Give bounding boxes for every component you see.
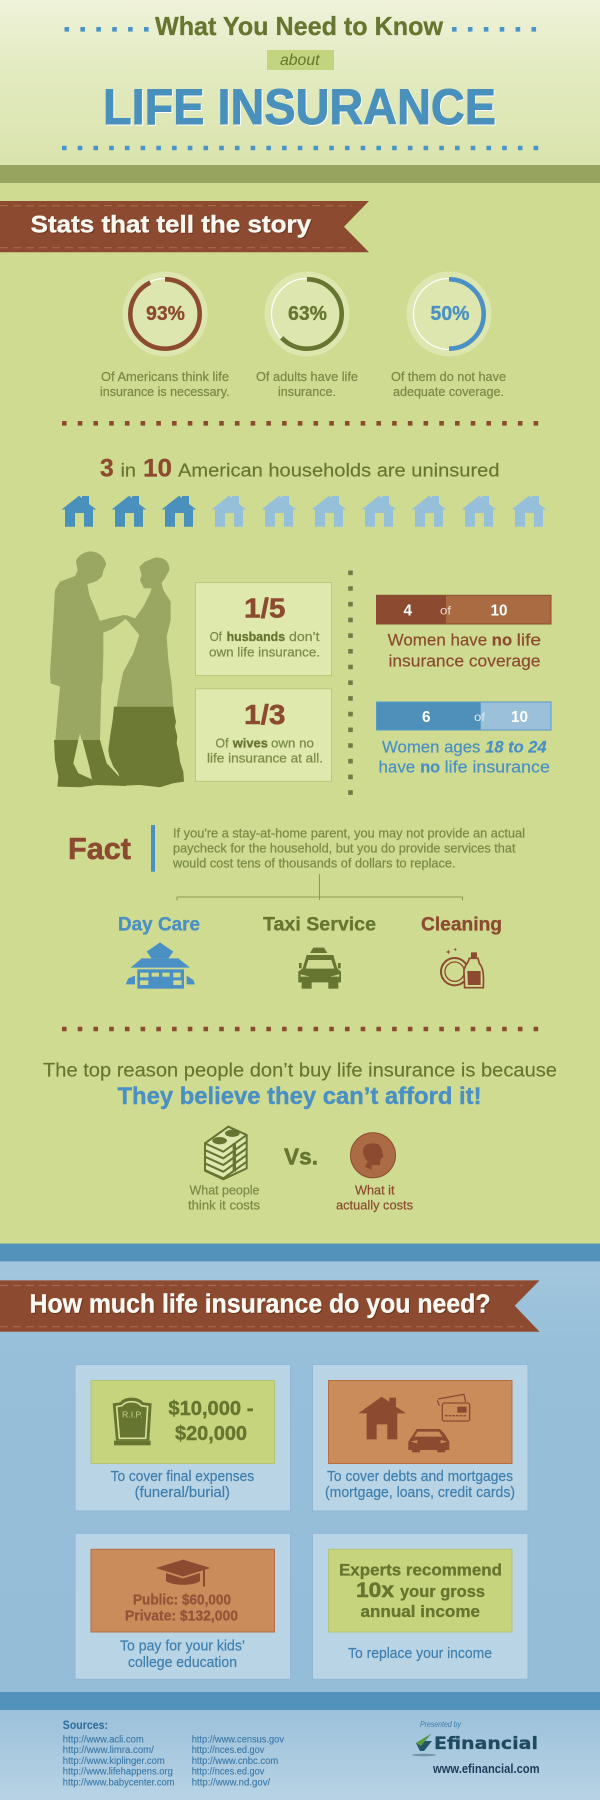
- stat: 63 percent: insurance.: [278, 384, 336, 399]
- comparison: what people think it costs: [188, 1127, 260, 1212]
- stat: 93 percent: [100, 272, 230, 399]
- stat bar: 6 of 10 women 18 to 24: [376, 702, 551, 777]
- label: versus: Vs.: [284, 1143, 318, 1169]
- fact callout: paycheck for the household, but you do provide services that: [173, 840, 516, 855]
- card: final expenses: $10,000 -: [168, 1398, 253, 1420]
- icon: tombstone: R.I.P.: [122, 1411, 143, 1420]
- illustration: couple silhouette: [50, 551, 184, 787]
- footer: [0, 1692, 600, 1800]
- service: day care: [118, 915, 200, 989]
- about tag: about: [280, 52, 320, 69]
- service: cleaning: [421, 915, 502, 988]
- service: day care: Day Care: [118, 915, 200, 936]
- stat bar: 6 of 10 women 18 to 24: Women ages: [382, 738, 480, 756]
- stat bar: 6 of 10 women 18 to 24: life insurance: [445, 759, 550, 777]
- icon: plate and detergent bottle: [441, 948, 484, 988]
- card: one fifth of husbands: [196, 582, 332, 676]
- comparison: what people think it costs: think it costs: [188, 1197, 260, 1212]
- sources list: http://www.census.gov: [192, 1734, 284, 1746]
- sources list: http://www.lifehappens.org: [63, 1767, 173, 1778]
- sources list: [63, 1718, 284, 1788]
- heading: 3 in 10 households: 10: [143, 455, 172, 483]
- card: final expenses: [75, 1364, 290, 1511]
- sources list: http://nces.ed.gov: [192, 1745, 264, 1756]
- service: cleaning: Cleaning: [421, 915, 502, 936]
- card: one third of wives: Of: [216, 735, 229, 750]
- main title: LIFE INSURANCE: [103, 79, 496, 135]
- card: one fifth of husbands: don’t: [289, 629, 320, 644]
- fact callout: Fact: [68, 831, 131, 866]
- card: replace your income: To replace your income: [348, 1646, 492, 1662]
- logo: Efinancial: [412, 1719, 540, 1776]
- card: one fifth of husbands: husbands: [227, 629, 285, 644]
- card: final expenses: $20,000: [175, 1423, 247, 1445]
- banner: how much life insurance: [0, 1280, 540, 1332]
- icon: coin with head: [350, 1133, 396, 1178]
- stat bar: 4 of 10 women: 4: [404, 603, 412, 620]
- icon: tombstone: [113, 1398, 152, 1445]
- stat bar: 6 of 10 women 18 to 24: no: [420, 759, 440, 777]
- card: college education: Public: $60,000: [133, 1591, 231, 1608]
- icon: school building: [126, 942, 195, 989]
- stat: 93 percent: insurance is necessary.: [100, 384, 230, 399]
- card: college education: [75, 1533, 290, 1679]
- stat bar: 4 of 10 women: no: [492, 632, 512, 650]
- stat bar: 6 of 10 women 18 to 24: 18 to 24: [485, 738, 546, 756]
- icons: house, credit cards, car: [358, 1394, 470, 1452]
- stat: 63 percent: Of adults have life: [256, 369, 358, 384]
- card: one fifth of husbands: Of: [210, 629, 222, 644]
- comparison: what people think it costs: What people: [190, 1182, 260, 1197]
- stat bar: 4 of 10 women: [376, 595, 551, 671]
- card: debts and mortgages: [312, 1364, 528, 1511]
- stat: 63 percent: 63%: [288, 303, 327, 325]
- service: taxi service: [263, 915, 376, 989]
- sources list: http://nces.ed.gov: [192, 1767, 264, 1778]
- card: replace your income: Experts recommend: [339, 1562, 502, 1580]
- fact callout: would cost tens of thousands of dollars to replace.: [172, 855, 456, 870]
- card: one fifth of husbands: own life insurance.: [209, 645, 320, 660]
- heading: 3 in 10 households: American households are uninsured: [178, 460, 500, 481]
- card: one third of wives: life insurance at all.: [207, 751, 323, 766]
- about tag: [267, 50, 334, 70]
- card: one third of wives: 1/3: [244, 699, 286, 730]
- card: debts and mortgages: To cover debts and mortgages: [327, 1469, 513, 1485]
- card: one third of wives: wives: [232, 735, 268, 750]
- heading: 3 in 10 households: in: [120, 460, 136, 481]
- card: final expenses: (funeral/burial): [135, 1485, 230, 1501]
- panel: header: [0, 0, 600, 183]
- stat: 50 percent: [391, 272, 506, 399]
- stat bar: 6 of 10 women 18 to 24: of: [474, 710, 486, 724]
- comparison: what it actually costs: [336, 1133, 413, 1212]
- banner: stats that tell the story: [0, 201, 369, 252]
- sources list: http://www.babycenter.com: [63, 1777, 174, 1788]
- statement: top reason: The top reason people don’t buy life insurance is because: [43, 1060, 557, 1082]
- card: replace your income: your gross: [400, 1583, 485, 1601]
- banner: stats that tell the story: Stats that tell the story: [31, 212, 311, 239]
- icon: taxi: [298, 948, 341, 989]
- stat: 50 percent: adequate coverage.: [393, 384, 504, 399]
- sources list: http://www.nd.gov/: [192, 1777, 270, 1788]
- comparison: what it actually costs: actually costs: [336, 1197, 413, 1212]
- stat bar: 4 of 10 women: of: [440, 604, 452, 618]
- card: debts and mortgages: (mortgage, loans, credit cards): [325, 1485, 515, 1501]
- logo: Efinancial: Presented by: [420, 1719, 462, 1729]
- stat bar: 4 of 10 women: 10: [490, 603, 508, 620]
- card: final expenses: To cover final expenses: [111, 1469, 254, 1485]
- comparison: what it actually costs: What it: [355, 1182, 395, 1197]
- card: one third of wives: [196, 689, 332, 781]
- sources list: http://www.acli.com: [63, 1734, 144, 1746]
- banner: how much life insurance: How much life insurance do you need?: [30, 1290, 490, 1318]
- card: college education: Private: $132,000: [125, 1607, 238, 1624]
- bracket connector: [177, 874, 462, 900]
- heading: 3 in 10 households: 3: [100, 455, 114, 483]
- stat bar: 4 of 10 women: Women have: [388, 632, 487, 650]
- card: replace your income: annual income: [360, 1603, 480, 1621]
- title line: What You Need to Know: [155, 11, 444, 41]
- stat bar: 6 of 10 women 18 to 24: 6: [422, 709, 431, 726]
- sources list: http://www.cnbc.com: [192, 1756, 278, 1767]
- sources list: http://www.limra.com/: [63, 1745, 154, 1756]
- stat: 93 percent: 93%: [146, 303, 185, 325]
- card: college education: college education: [128, 1655, 237, 1671]
- service: taxi service: Taxi Service: [263, 915, 376, 936]
- stat: 50 percent: 50%: [430, 303, 470, 325]
- stat: 50 percent: Of them do not have: [391, 369, 506, 384]
- statement: top reason: [43, 1060, 557, 1110]
- logo: Efinancial: www.efinancial.com: [432, 1762, 540, 1776]
- fact callout: If you're a stay-at-home parent, you may not provide an actual: [173, 825, 525, 840]
- sources list: http://www.kiplinger.com: [63, 1756, 165, 1767]
- stat bar: 4 of 10 women: insurance coverage: [388, 653, 540, 671]
- card: one third of wives: own no: [271, 735, 314, 750]
- icon: money stack: [205, 1127, 247, 1179]
- card: replace your income: 10x: [356, 1579, 394, 1602]
- card: college education: To pay for your kids’: [120, 1638, 245, 1654]
- fact callout: [68, 825, 525, 872]
- stat: 93 percent: Of Americans think life: [101, 369, 229, 384]
- card: one fifth of husbands: 1/5: [244, 593, 286, 624]
- logo: Efinancial: Efinancial: [434, 1734, 538, 1754]
- section background: blue: [0, 1244, 600, 1800]
- icon row: ten houses: [62, 496, 546, 527]
- stat: 63 percent: [256, 272, 358, 399]
- card: replace your income: [312, 1533, 528, 1679]
- stat bar: 6 of 10 women 18 to 24: 10: [511, 709, 528, 726]
- stat bar: 6 of 10 women 18 to 24: have: [378, 759, 415, 777]
- stat bar: 4 of 10 women: life: [517, 632, 541, 650]
- sources list: Sources:: [63, 1718, 108, 1732]
- heading: 3 in 10 households: [100, 455, 500, 483]
- icon: graduation cap: [156, 1560, 210, 1586]
- statement: top reason: They believe they can’t afford it!: [118, 1083, 482, 1110]
